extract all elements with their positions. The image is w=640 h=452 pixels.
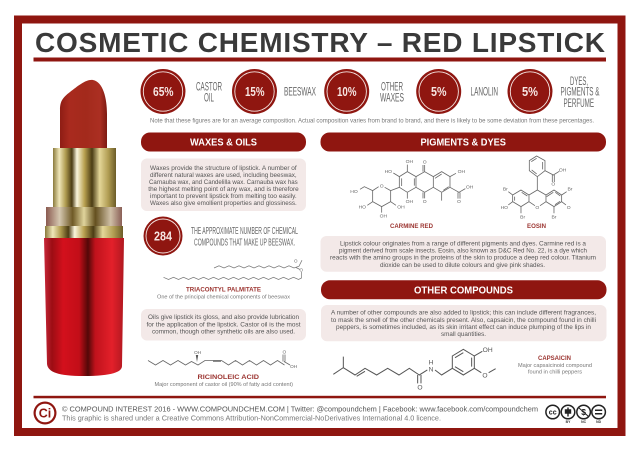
- stat: 284 compounds: THE APPROXIMATE NUMBER OF CHEMICAL: [191, 226, 298, 237]
- panel: other compounds: [321, 280, 606, 392]
- stat: castor oil 65%: 65%: [153, 85, 174, 99]
- text block: waxes: Waxes provide the structure of lipstick. A number of: [150, 165, 297, 172]
- lipstick illustration: [44, 80, 124, 376]
- icon: compound interest logo: Ci: [39, 406, 51, 420]
- molecule: capsaicin: O: [482, 372, 488, 379]
- heading: other compounds: [321, 280, 606, 299]
- molecule: carmine red: HO: [359, 204, 366, 210]
- label: ricinoleic acid: [154, 374, 293, 388]
- molecule: carmine red: O: [423, 199, 427, 205]
- stat: castor oil 65%: OIL: [204, 92, 214, 104]
- stat: 284 compounds: [144, 216, 298, 256]
- stat: dyes 5%: PIGMENTS &: [560, 86, 600, 98]
- text block: oils: Oils give lipstick its gloss, and also provide lubrication: [148, 314, 300, 321]
- label: capsaicin: CAPSAICIN: [538, 355, 571, 362]
- stat: other waxes 10%: WAXES: [380, 92, 404, 104]
- text block: other compounds: small quantities.: [441, 331, 486, 338]
- text block: other compounds: [321, 305, 606, 341]
- stat: other waxes 10%: 10%: [337, 85, 356, 99]
- label: capsaicin: found in chilli peppers: [528, 370, 582, 376]
- molecule: eosin: O: [567, 205, 571, 211]
- molecule: eosin: [501, 156, 573, 220]
- heading: waxes and oils: WAXES & OILS: [190, 138, 257, 148]
- composition note: Note that these figures are for an average composition. Actual composition varies from brand to brand, and there is likely to be some deviation from these percentages.: [150, 119, 594, 125]
- molecule: carmine red: O: [380, 184, 384, 190]
- stat: lanolin 5%: [416, 69, 498, 114]
- molecule: carmine red: OH: [466, 184, 474, 190]
- icon: creative commons licence badges: [546, 405, 605, 424]
- text block: pigments: [320, 236, 606, 272]
- molecule: capsaicin: H: [429, 360, 434, 367]
- molecule: carmine red: OH: [380, 214, 387, 220]
- stat: lanolin 5%: LANOLIN: [470, 86, 498, 98]
- icon: creative commons licence badges: BY: [566, 420, 571, 424]
- stat: 284 compounds: COMPOUNDS THAT MAKE UP BEESWAX.: [194, 238, 295, 248]
- molecule: carmine red: HO: [385, 169, 392, 175]
- molecule: eosin: Br: [551, 214, 557, 220]
- molecule: capsaicin: O: [417, 385, 423, 392]
- panel: waxes and oils: [141, 132, 306, 388]
- text block: pigments: pigment derived from scale insects. Eosin, also known as D&C Red No. 22, is a dye which: [339, 248, 588, 255]
- molecule: triacontyl palmitate: [164, 258, 304, 280]
- label: ricinoleic acid: Major component of castor oil (90% of fatty acid content): [154, 382, 293, 388]
- molecule: eosin: OH: [559, 168, 567, 174]
- molecule: carmine red: HO: [350, 189, 358, 195]
- text block: oils: common, though other synthetic oils are also used.: [152, 329, 295, 336]
- text block: pigments: dioxide can be used to dilute colours and give pink shades.: [380, 262, 545, 269]
- stat: other waxes 10%: [324, 69, 404, 114]
- molecule: capsaicin: OH: [483, 347, 493, 354]
- molecule: ricinoleic acid: OH: [194, 350, 202, 356]
- molecule: ricinoleic acid: [148, 350, 298, 370]
- stat: dyes 5%: [508, 69, 600, 114]
- text block: waxes: Carnauba wax, and Candelilla wax. Carnauba wax has: [149, 179, 298, 186]
- text block: oils: [141, 309, 306, 340]
- molecule: eosin: HO: [501, 205, 508, 211]
- text block: oils: for the application of the lipstick. Castor oil is the most: [146, 321, 301, 328]
- molecule: eosin: Br: [520, 214, 525, 220]
- text block: other compounds: to mask the smell of the other chemicals present. Also, capsaicin, the compound found in chilli: [331, 317, 596, 324]
- molecule: eosin: Br: [503, 187, 508, 193]
- composition row: [140, 69, 600, 114]
- molecule: carmine red: OH: [406, 159, 413, 165]
- stat: dyes 5%: 5%: [522, 85, 538, 99]
- molecule: carmine red: OH: [406, 199, 413, 205]
- stat: other waxes 10%: OTHER: [381, 82, 403, 94]
- label: capsaicin: [518, 355, 592, 376]
- label: triacontyl palmitate: TRIACONTYL PALMITATE: [186, 287, 262, 294]
- molecule: capsaicin: N: [429, 366, 434, 373]
- stat: castor oil 65%: [140, 69, 222, 114]
- molecule: carmine red: O: [457, 199, 461, 205]
- label: triacontyl palmitate: One of the principal chemical components of beeswax: [157, 294, 290, 300]
- molecule: ricinoleic acid: OH: [290, 364, 298, 370]
- molecule: ricinoleic acid: O: [282, 350, 286, 356]
- text block: other compounds: A number of other compounds are also added to lipstick; this can include different fragrances,: [331, 310, 596, 317]
- footer credits: © COMPOUND INTEREST 2016 - WWW.COMPOUNDCHEM.COM | Twitter: @compoundchem | Facebook: www.facebook.com/compoundchem: [62, 405, 538, 414]
- label: eosin: EOSIN: [527, 223, 546, 230]
- text block: other compounds: peppers, is sometimes included, as its skin irritant effect can induce plumping of the lips in: [336, 324, 592, 331]
- stat: lanolin 5%: 5%: [431, 85, 446, 99]
- text block: pigments: reacts with the amino groups in the proteins of the skin to produce a deep red colour. Titanium: [330, 255, 596, 262]
- heading: pigments and dyes: PIGMENTS & DYES: [420, 138, 506, 148]
- molecule: eosin: O: [551, 182, 555, 188]
- label: ricinoleic acid: RICINOLEIC ACID: [198, 374, 259, 381]
- stat: castor oil 65%: CASTOR: [196, 82, 222, 94]
- text block: pigments: Lipstick colour originates from a range of different pigments and dyes. Carmine red is a: [340, 241, 587, 248]
- stat: beeswax 15%: BEESWAX: [284, 86, 316, 98]
- label: capsaicin: Major capsaicinoid compound: [518, 363, 592, 369]
- label: triacontyl palmitate: [157, 287, 290, 300]
- stat: beeswax 15%: [232, 69, 316, 114]
- icon: creative commons licence badges: cc: [549, 410, 557, 416]
- molecule: eosin: Br: [567, 187, 573, 193]
- molecule: carmine red: [350, 159, 474, 220]
- molecule: triacontyl palmitate: O: [300, 268, 304, 272]
- icon: creative commons licence badges: ND: [596, 420, 602, 424]
- text block: waxes: the highest melting point of any wax, and is therefore: [148, 186, 299, 193]
- molecule: carmine red: OH: [397, 204, 405, 210]
- title: COSMETIC CHEMISTRY – RED LIPSTICK: [35, 27, 605, 58]
- text block: waxes: different natural waxes are used, including beeswax,: [150, 172, 297, 179]
- molecule: eosin: O: [535, 205, 539, 211]
- label: carmine red: CARMINE RED: [390, 223, 433, 230]
- icon: compound interest logo: [34, 402, 56, 424]
- footer rule: [34, 396, 606, 398]
- footer credits: This graphic is shared under a Creative Commons Attribution-NonCommercial-NoDerivatives International 4.0 licence.: [62, 414, 441, 423]
- text block: waxes: Waxes also give emollient properties and glossiness.: [150, 200, 297, 207]
- stat: beeswax 15%: 15%: [245, 85, 264, 99]
- icon: creative commons licence badges: $: [581, 407, 586, 417]
- molecule: triacontyl palmitate: O: [294, 258, 298, 264]
- text block: waxes: important to prevent lipstick from melting too easily.: [150, 193, 297, 200]
- heading: other compounds: OTHER COMPOUNDS: [414, 286, 513, 296]
- stat: dyes 5%: PERFUME: [564, 98, 594, 110]
- icon: creative commons licence badges: NC: [581, 420, 587, 424]
- heading: pigments and dyes: [320, 132, 606, 152]
- molecule: carmine red: O: [423, 159, 427, 165]
- panel: pigments and dyes: [320, 132, 606, 272]
- stat: dyes 5%: DYES,: [570, 76, 588, 88]
- molecule: capsaicin: [333, 347, 496, 392]
- title underline: [34, 58, 606, 62]
- stat: 284 compounds: 284: [154, 230, 172, 244]
- text block: waxes: [141, 158, 306, 211]
- footer credits: [62, 405, 538, 423]
- heading: waxes and oils: [141, 132, 306, 152]
- molecule: carmine red: OH: [458, 169, 465, 175]
